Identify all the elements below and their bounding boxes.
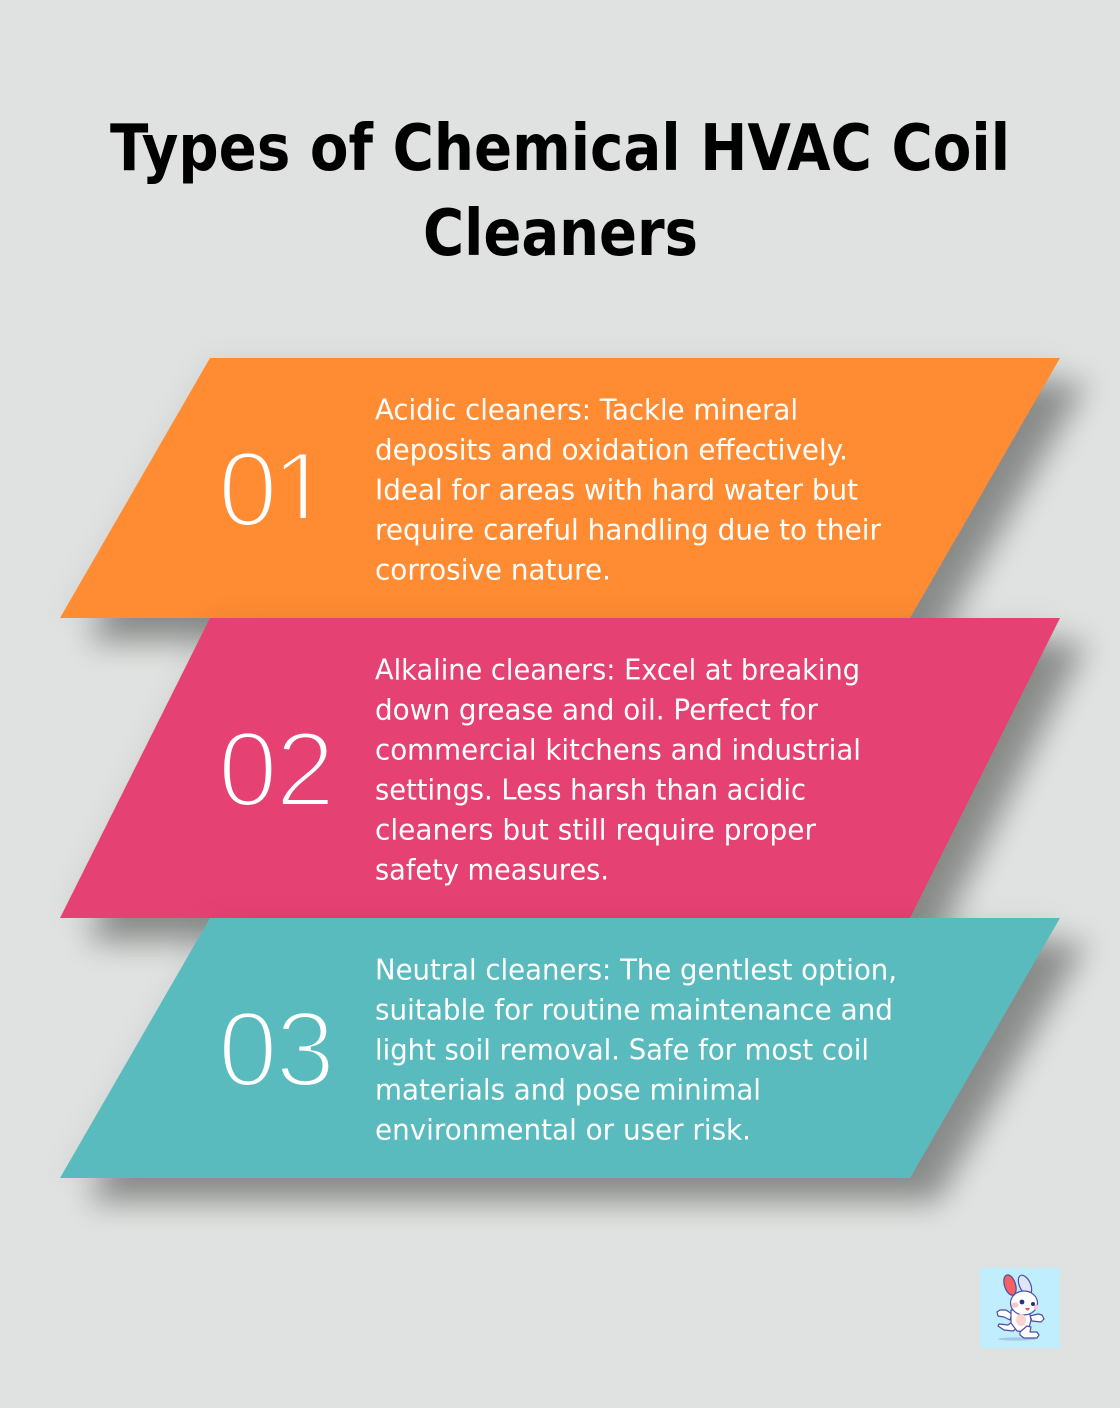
acidic cleaners description: corrosive nature. <box>375 554 611 586</box>
alkaline cleaners description: settings. Less harsh than acidic <box>375 774 806 806</box>
neutral cleaners description: light soil removal. Safe for most coil <box>375 1034 869 1066</box>
panel: acidic cleaners <box>60 358 1060 618</box>
alkaline cleaners description: down grease and oil. Perfect for <box>375 694 818 726</box>
neutral cleaners description <box>375 954 897 1146</box>
panel: alkaline cleaners <box>60 618 1060 918</box>
pink parallelogram <box>60 618 1060 918</box>
alkaline cleaners description <box>375 654 861 886</box>
orange parallelogram <box>60 358 1060 618</box>
number 01: 01 <box>218 429 331 549</box>
number 02: 02 <box>218 709 335 829</box>
title <box>110 112 1010 271</box>
teal parallelogram <box>60 918 1060 1178</box>
acidic cleaners description: deposits and oxidation effectively. <box>375 434 848 466</box>
icon: running rabbit logo <box>980 1268 1060 1348</box>
alkaline cleaners description: safety measures. <box>375 854 609 886</box>
acidic cleaners description: Acidic cleaners: Tackle mineral <box>375 394 798 426</box>
alkaline cleaners description: commercial kitchens and industrial <box>375 734 861 766</box>
title: Cleaners <box>423 197 698 271</box>
neutral cleaners description: environmental or user risk. <box>375 1114 751 1146</box>
alkaline cleaners description: cleaners but still require proper <box>375 814 816 846</box>
neutral cleaners description: Neutral cleaners: The gentlest option, <box>375 954 897 986</box>
neutral cleaners description: materials and pose minimal <box>375 1074 761 1106</box>
acidic cleaners description <box>375 394 881 586</box>
neutral cleaners description: suitable for routine maintenance and <box>375 994 893 1026</box>
acidic cleaners description: Ideal for areas with hard water but <box>375 474 858 506</box>
number 03: 03 <box>218 989 335 1109</box>
alkaline cleaners description: Alkaline cleaners: Excel at breaking <box>375 654 860 686</box>
panel: neutral cleaners <box>60 918 1060 1178</box>
acidic cleaners description: require careful handling due to their <box>375 514 881 546</box>
title: Types of Chemical HVAC Coil <box>110 112 1010 186</box>
